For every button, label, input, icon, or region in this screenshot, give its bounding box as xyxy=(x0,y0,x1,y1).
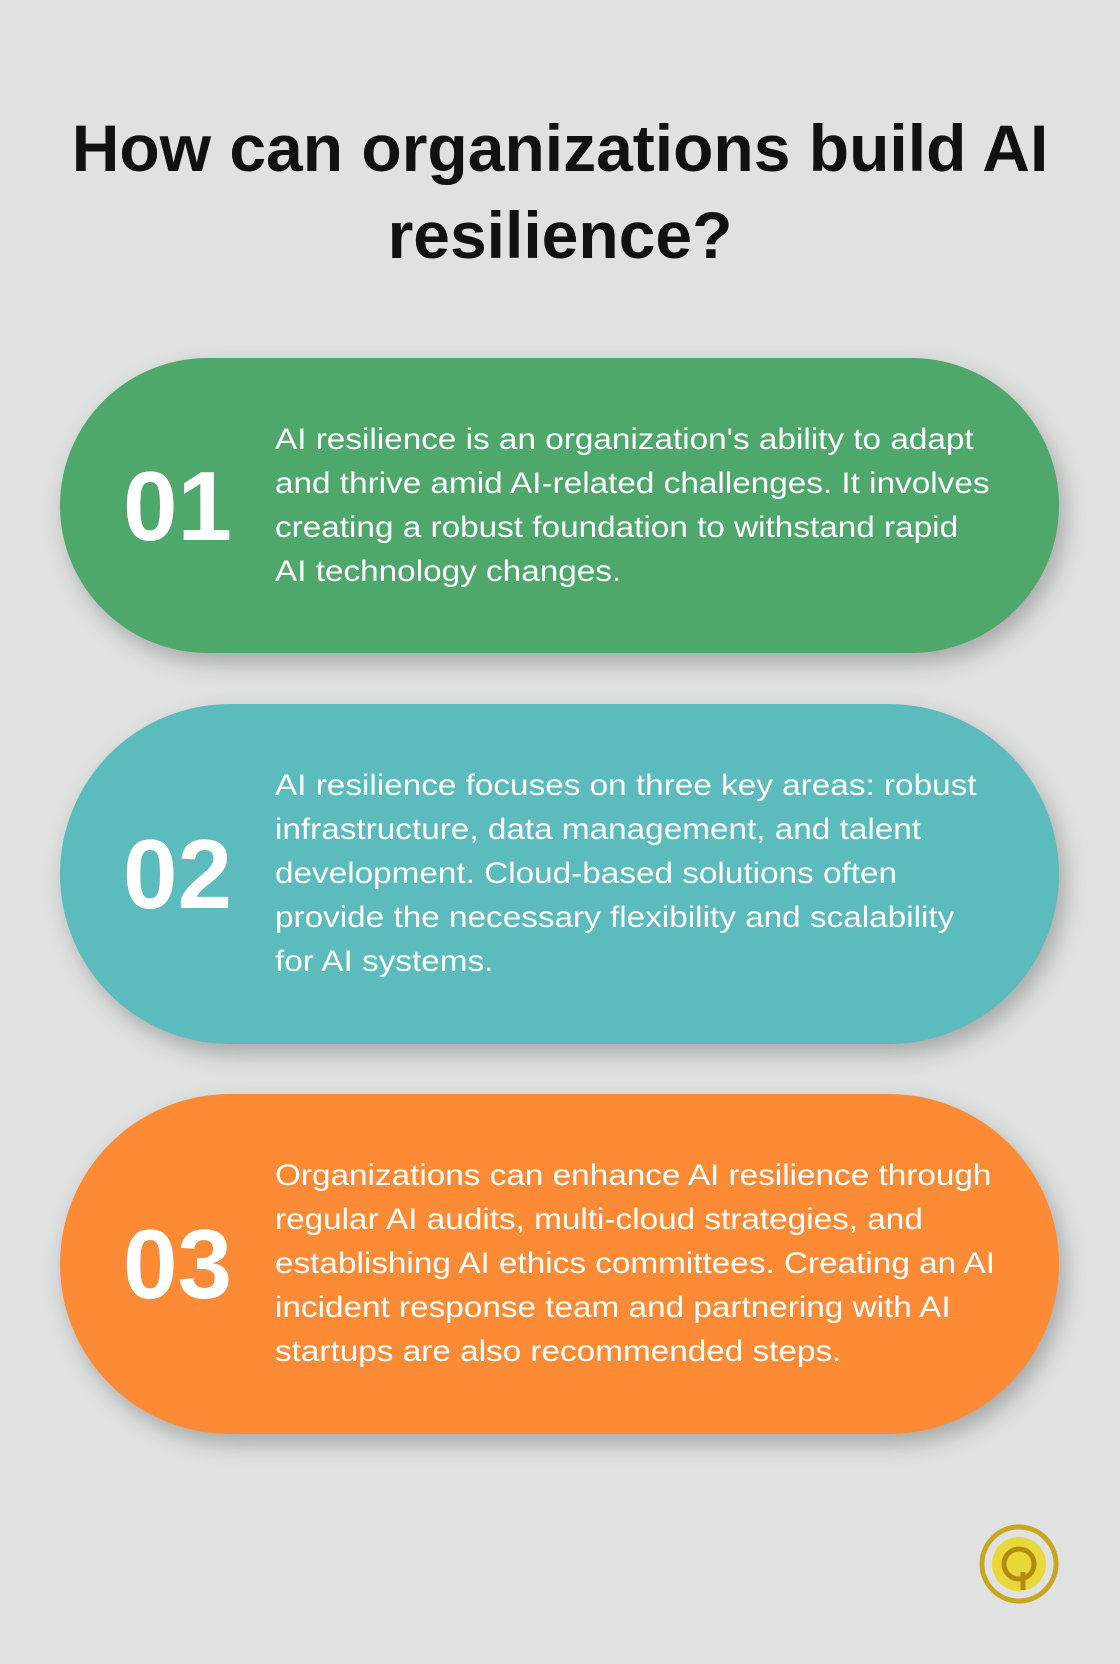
text 03: establishing AI ethics committees. Creating an AI xyxy=(275,1247,995,1280)
text 01 xyxy=(275,422,989,588)
text 03: regular AI audits, multi-cloud strategies, and xyxy=(275,1203,923,1236)
text 01: and thrive amid AI-related challenges. It involves xyxy=(275,466,989,500)
panel: 03 xyxy=(60,1094,1059,1434)
text 03: incident response team and partnering with AI xyxy=(275,1291,951,1324)
number 01: 01 xyxy=(123,450,232,560)
text 02: for AI systems. xyxy=(275,945,493,978)
number 02: 02 xyxy=(123,819,232,929)
text 02: provide the necessary flexibility and scalability xyxy=(275,901,954,934)
text 03: Organizations can enhance AI resilience through xyxy=(275,1159,991,1192)
title: resilience? xyxy=(388,198,732,272)
text 02: infrastructure, data management, and talent xyxy=(275,813,921,846)
panel: 02 xyxy=(60,704,1059,1044)
panel: 01 xyxy=(60,358,1059,653)
number 03: 03 xyxy=(123,1209,232,1319)
text 01: AI resilience is an organization's ability to adapt xyxy=(275,422,974,456)
title xyxy=(72,111,1048,272)
text 03 xyxy=(275,1159,995,1368)
text 02: AI resilience focuses on three key areas: robust xyxy=(275,769,977,802)
text 02 xyxy=(275,769,977,978)
text 01: creating a robust foundation to withstand rapid xyxy=(275,510,958,544)
title: How can organizations build AI xyxy=(72,111,1048,185)
text 03: startups are also recommended steps. xyxy=(275,1335,841,1368)
text 01: AI technology changes. xyxy=(275,554,621,588)
icon: logo xyxy=(980,1524,1058,1604)
text 02: development. Cloud-based solutions often xyxy=(275,857,897,890)
